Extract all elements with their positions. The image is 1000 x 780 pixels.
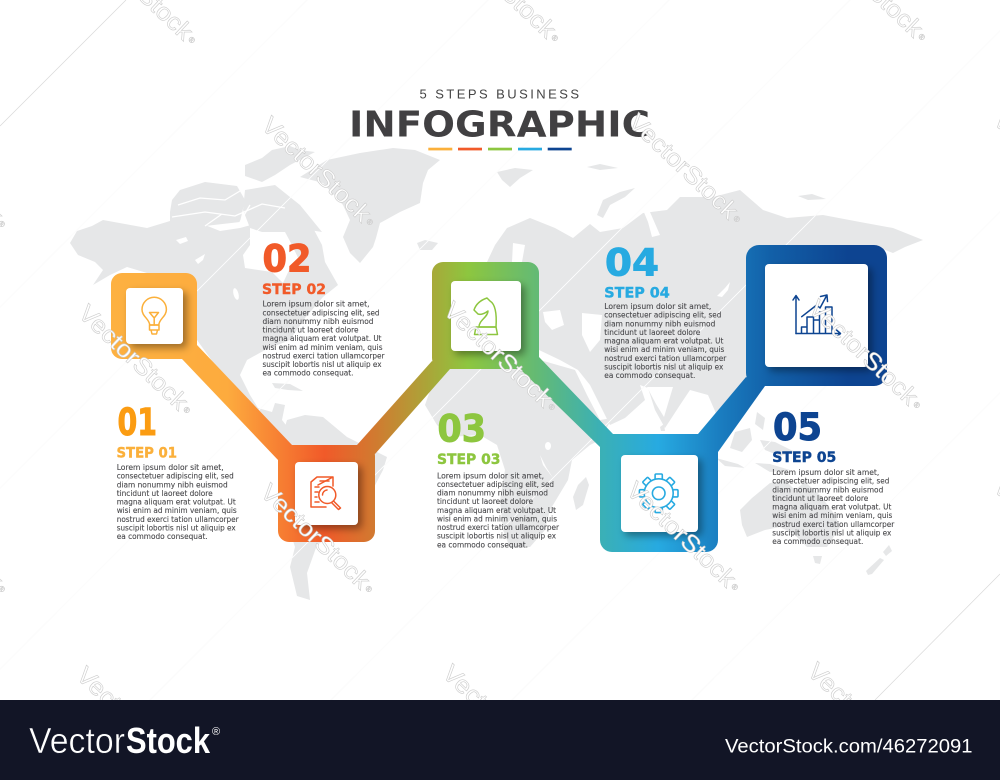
body: nostrud exerci tation ullamcorper <box>262 352 385 360</box>
body: tincidunt ut laoreet dolore <box>437 497 533 506</box>
body: diam nonummy nibh euismod <box>437 489 548 498</box>
world map <box>70 146 923 600</box>
step 2 tile <box>295 462 358 525</box>
gradient ribbon with five frames <box>111 245 887 552</box>
body: nostrud exerci tation ullamcorper <box>604 354 727 363</box>
step 5 tile <box>765 264 868 367</box>
body: ea commodo consequat. <box>117 532 208 541</box>
watermarks: VectorStock <box>256 112 377 228</box>
step 1 tile <box>126 288 183 344</box>
frame 4 <box>600 434 718 552</box>
colour dashes <box>428 148 572 150</box>
body <box>437 471 560 549</box>
watermarks: ® <box>186 35 197 45</box>
body <box>772 468 895 546</box>
watermarks: ® <box>364 217 375 227</box>
body: wisi enim ad minim veniam, quis <box>117 506 237 515</box>
step 5 text <box>772 405 895 546</box>
connector 1 to 2 <box>182 345 292 460</box>
body: nostrud exerci tation ullamcorper <box>437 523 560 532</box>
body: magna aliquam erat volutpat. Ut <box>772 502 891 512</box>
number 04: 04 <box>605 241 659 285</box>
connector 4 to 5 <box>698 377 765 452</box>
body: ea commodo consequat. <box>604 371 695 380</box>
body: magna aliquam erat volutpat. Ut <box>117 498 236 506</box>
label: STEP 01 <box>116 446 177 462</box>
watermarks: ® <box>731 214 742 224</box>
title block <box>349 86 650 150</box>
body: magna aliquam erat volutpat. Ut <box>604 336 723 346</box>
body: magna aliquam erat volutpat. Ut <box>437 506 556 515</box>
body: Lorem ipsum dolor sit amet, <box>772 468 879 477</box>
label: STEP 05 <box>772 450 836 466</box>
frame 2 <box>278 445 375 542</box>
icon: light bulb <box>142 297 166 334</box>
watermarks: VectorStock <box>255 479 376 595</box>
body: diam nonummy nibh euismod <box>772 485 883 494</box>
subtitle: 5 STEPS BUSINESS <box>420 86 579 101</box>
body: Lorem ipsum dolor sit amet, <box>604 302 711 311</box>
number 02: 02 <box>262 237 312 281</box>
body <box>604 302 727 380</box>
body: wisi enim ad minim veniam, quis <box>262 343 382 352</box>
watermarks: VectorStock <box>437 660 558 776</box>
icon: gear <box>639 474 678 513</box>
label: STEP 04 <box>604 286 670 302</box>
watermarks: VectorStock <box>802 658 923 774</box>
watermarks: ® <box>363 584 374 594</box>
step 4 tile <box>621 455 698 532</box>
body: Lorem ipsum dolor sit amet, <box>437 471 544 480</box>
label: STEP 02 <box>262 282 326 298</box>
footer logo: Stock: Stock <box>126 720 211 761</box>
body: tincidunt ut laoreet dolore <box>772 494 868 503</box>
body: wisi enim ad minim veniam, quis <box>772 511 892 520</box>
body: tincidunt ut laoreet dolore <box>117 489 213 498</box>
body: diam nonummy nibh euismod <box>117 480 228 489</box>
body: consectetuer adipiscing elit, sed <box>604 311 721 320</box>
step 3 tile <box>451 281 521 351</box>
watermarks: VectorStock <box>621 477 742 593</box>
body: consectetuer adipiscing elit, sed <box>262 308 380 317</box>
frame 1 <box>111 273 197 359</box>
watermarks: ® <box>549 33 560 43</box>
heading: INFOGRAPHIC <box>349 105 650 146</box>
watermarks: VectorStock <box>71 662 192 778</box>
body: tincidunt ut laoreet dolore <box>604 328 700 337</box>
step 4 text <box>604 241 727 380</box>
body: suscipit lobortis nisl ut aliquip ex <box>437 532 556 541</box>
watermarks: VectorStock <box>438 297 559 413</box>
body: magna aliquam erat volutpat. Ut <box>262 334 382 343</box>
body: Lorem ipsum dolor sit amet, <box>262 300 370 309</box>
icon: chess knight <box>474 298 498 334</box>
label: STEP 03 <box>437 452 500 468</box>
number 05: 05 <box>773 405 822 449</box>
body: suscipit lobortis nisl ut aliquip ex <box>262 360 382 369</box>
body: consectetuer adipiscing elit, sed <box>437 480 554 489</box>
watermarks: ® <box>916 32 927 42</box>
body: Lorem ipsum dolor sit amet, <box>117 463 224 472</box>
body: nostrud exerci tation ullamcorper <box>117 515 239 524</box>
icon: growth chart <box>793 295 840 337</box>
number 03: 03 <box>438 407 486 451</box>
watermarks: ® <box>546 402 557 412</box>
body: diam nonummy nibh euismod <box>262 317 374 326</box>
connector 3 to 4 <box>520 357 613 447</box>
body: ea commodo consequat. <box>262 369 354 378</box>
body: nostrud exerci tation ullamcorper <box>772 520 895 529</box>
footer url: VectorStock.com/46272091 <box>725 736 972 758</box>
body: tincidunt ut laoreet dolore <box>262 326 359 335</box>
watermarks: VectorStock <box>803 295 924 411</box>
footer logo: Vector: Vector <box>29 720 125 761</box>
frame 5 <box>746 245 887 386</box>
body: suscipit lobortis nisl ut aliquip ex <box>604 362 724 371</box>
body: ea commodo consequat. <box>772 537 863 546</box>
body: wisi enim ad minim veniam, quis <box>437 514 557 524</box>
watermarks: VectorStock <box>623 109 744 225</box>
body: diam nonummy nibh euismod <box>604 319 715 328</box>
body <box>262 300 385 378</box>
icon: document and magnifier <box>311 477 340 510</box>
footer band <box>0 700 1000 780</box>
body: suscipit lobortis nisl ut aliquip ex <box>117 523 236 532</box>
watermarks: ® <box>181 405 192 415</box>
body: consectetuer adipiscing elit, sed <box>772 477 889 486</box>
step 2 text <box>262 237 385 378</box>
number 01: 01 <box>118 400 157 444</box>
body: ea commodo consequat. <box>437 540 528 549</box>
body: suscipit lobortis nisl ut aliquip ex <box>772 528 892 537</box>
watermarks: ® <box>729 582 740 592</box>
watermarks: VectorStock <box>73 300 194 416</box>
footer registered mark: ® <box>212 726 220 738</box>
body: consectetuer adipiscing elit, sed <box>117 472 234 481</box>
step 3 text <box>437 407 560 549</box>
body <box>117 463 239 541</box>
watermarks: ® <box>911 400 922 410</box>
frame 3 <box>432 262 539 369</box>
body: wisi enim ad minim veniam, quis <box>604 345 724 354</box>
step 1 text <box>116 400 239 541</box>
connector 2 to 3 <box>357 361 450 454</box>
